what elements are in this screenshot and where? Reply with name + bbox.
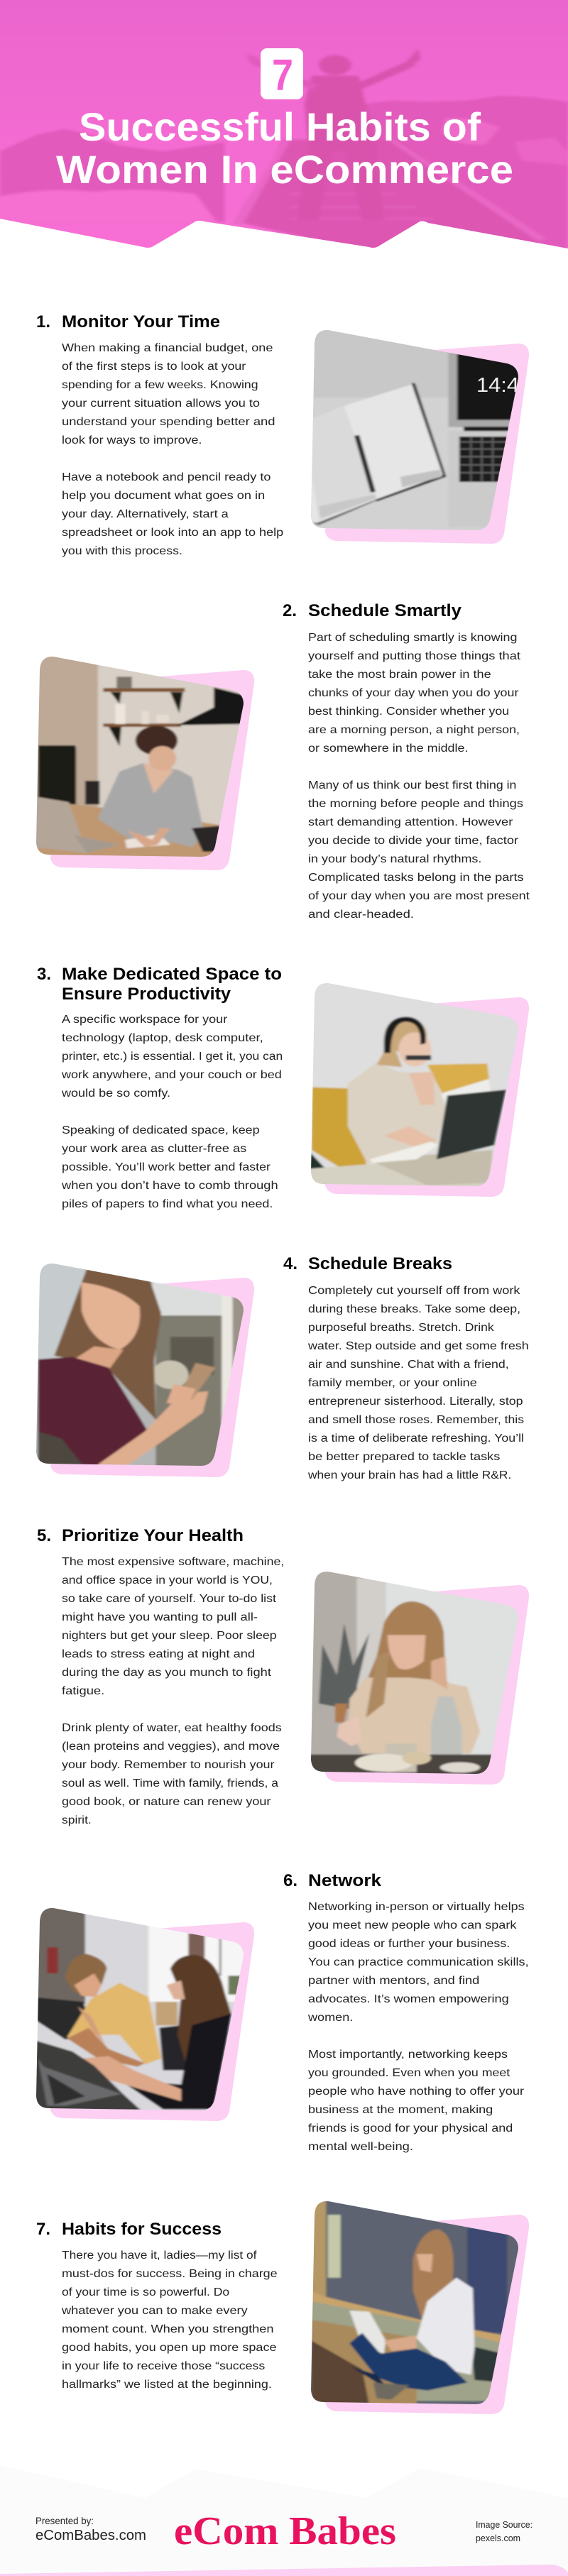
body text: you with this process. [62, 545, 182, 557]
presented by credit [36, 2515, 146, 2543]
body text: (lean proteins and veggies), and move [62, 1741, 280, 1753]
image source credit: Image Source: [476, 2519, 532, 2530]
body text: best thinking. Consider whether you [308, 706, 509, 718]
body text: Most importantly, networking keeps [308, 2049, 508, 2061]
body text: is a time of deliberate refreshing. You’ll [308, 1432, 524, 1445]
body text: The most expensive software, machine, [62, 1556, 284, 1568]
body text: you meet new people who can spark [308, 1919, 518, 1931]
logo: eCom Babes [174, 2509, 396, 2553]
body text: Complicated tasks belong in the parts [308, 872, 524, 884]
body text: A specific workspace for your [62, 1014, 228, 1026]
body text: in your body’s natural rhythms. [308, 853, 481, 865]
body text: might have you wanting to pull all- [62, 1611, 258, 1623]
body text: piles of papers to find what you need. [62, 1198, 273, 1210]
body text: people who have nothing to offer your [308, 2086, 525, 2098]
body text: of your day when you are most present [308, 890, 530, 902]
photo: woman looking at phone [33, 1261, 254, 1477]
body text: nighters but get your sleep. Poor sleep [62, 1630, 277, 1642]
body text: good habits, you open up more space [62, 2342, 277, 2354]
body text: family member, or your online [308, 1377, 477, 1389]
body text: whatever you can to make every [61, 2305, 248, 2317]
heading: 7. [36, 2220, 50, 2239]
section 6: network [33, 1871, 529, 2153]
heading: Schedule Breaks [308, 1254, 452, 1273]
footer faint background shape [0, 2465, 568, 2576]
body text: so take care of yourself. Your to-do list [62, 1593, 277, 1605]
body text: and clear-headed. [308, 909, 414, 921]
heading: 3. [37, 965, 51, 984]
body text: Completely cut yourself off from work [308, 1285, 521, 1297]
body text: take the most brain power in the [308, 669, 491, 681]
section 7: habits for success [36, 2196, 529, 2414]
body text: fatigue. [62, 1685, 104, 1697]
section 4: schedule breaks [33, 1254, 529, 1481]
body text: when you don’t have to comb through [61, 1180, 278, 1192]
body text: You can practice communication skills, [308, 1956, 529, 1968]
body text: technology (laptop, desk computer, [62, 1032, 263, 1044]
body text: the morning before people and things [308, 798, 523, 810]
photo: woman eating a meal [305, 1569, 529, 1785]
image source credit [476, 2519, 532, 2543]
body text: Part of scheduling smartly is knowing [308, 632, 517, 644]
body text: good book, or nature can renew your [62, 1796, 271, 1808]
body text: your body. Remember to nourish your [62, 1759, 275, 1771]
photo: woman with laptop on bench [305, 2196, 529, 2414]
body text: you grounded. Even when you meet [308, 2067, 510, 2079]
body text [307, 1901, 529, 2153]
body text: during these breaks. Take some deep, [308, 1303, 520, 1315]
body text: start demanding attention. However [308, 816, 513, 828]
body text [307, 1285, 529, 1481]
body text: and smell those roses. Remember, this [308, 1414, 524, 1426]
image source credit: pexels.com [476, 2533, 520, 2543]
body text: be better prepared to tackle tasks [308, 1451, 500, 1463]
photo: woman writing in kitchen [33, 653, 254, 870]
body text: must-dos for success. Being in charge [62, 2268, 278, 2280]
body text [62, 1556, 284, 1826]
heading: Schedule Smartly [308, 601, 462, 620]
heading: Ensure Productivity [62, 985, 231, 1004]
heading: Network [308, 1871, 382, 1890]
body text: women. [307, 2012, 353, 2024]
body text: and office space in your world is YOU, [62, 1574, 273, 1586]
body text: Speaking of dedicated space, keep [62, 1124, 260, 1136]
presented by credit: Presented by: [36, 2515, 94, 2526]
footer [0, 2465, 568, 2576]
body text: partner with mentors, and find [308, 1975, 479, 1987]
body text [61, 1014, 283, 1210]
body text: friends is good for your physical and [308, 2122, 513, 2134]
body text: Networking in-person or virtually helps [308, 1901, 525, 1913]
heading: Habits for Success [62, 2220, 222, 2239]
body text: during the day as you munch to fight [62, 1667, 272, 1679]
body text: or somewhere in the middle. [308, 742, 469, 755]
section 1: monitor your time [36, 312, 529, 557]
body text: business at the moment, making [308, 2104, 493, 2116]
body text: of your time is so powerful. Do [62, 2286, 229, 2298]
body text [308, 632, 530, 921]
body text: chunks of your day when you do your [308, 687, 519, 699]
body text: spirit. [62, 1814, 92, 1826]
photo: notebook and laptop [305, 327, 529, 544]
number badge [261, 48, 303, 100]
heading: 5. [37, 1526, 51, 1545]
body text: you decide to divide your time, factor [308, 835, 519, 847]
section 2: schedule smartly [33, 601, 530, 921]
body text: possible. You’ll work better and faster [62, 1161, 271, 1173]
body text: when your brain has had a little R&R. [307, 1469, 511, 1481]
body text: help you document what goes on in [62, 490, 265, 502]
body text: would be so comfy. [61, 1087, 170, 1100]
body text: moment count. When you strengthen [62, 2323, 274, 2335]
body text: purposeful breaths. Stretch. Drink [308, 1322, 495, 1334]
body text [61, 2249, 278, 2391]
body text: look for ways to improve. [62, 434, 202, 446]
title: Successful Habits of [79, 104, 481, 149]
body text: work anywhere, and your couch or bed [61, 1069, 282, 1081]
heading: 4. [283, 1254, 297, 1273]
body text [62, 342, 283, 557]
body text: printer, etc.) is essential. I get it, you can [62, 1051, 283, 1063]
body text: mental well-being. [308, 2141, 413, 2153]
number badge: 7 [272, 51, 293, 100]
body text: spreadsheet or look into an app to help [62, 527, 283, 539]
body text: When making a financial budget, one [62, 342, 273, 354]
heading: 2. [283, 601, 297, 620]
body text: yourself and putting those things that [308, 650, 521, 662]
heading [37, 965, 282, 1004]
body text: Have a notebook and pencil ready to [62, 471, 271, 483]
body text: your current situation allows you to [62, 398, 260, 410]
body text: There you have it, ladies—my list of [62, 2249, 257, 2262]
body text: entrepreneur sisterhood. Literally, stop [308, 1396, 523, 1408]
heading: Monitor Your Time [62, 312, 220, 331]
section 5: prioritize your health [37, 1526, 529, 1826]
presented by credit: eComBabes.com [36, 2528, 146, 2543]
heading: 6. [283, 1871, 297, 1890]
laptop clock text: 14:4 [476, 374, 519, 397]
body text: air and sunshine. Chat with a friend, [308, 1359, 509, 1371]
body text: understand your spending better and [62, 416, 275, 428]
body text: leads to stress eating at night and [62, 1648, 255, 1660]
title [56, 104, 513, 192]
heading: Make Dedicated Space to [62, 965, 282, 984]
photo: woman with headphones on sofa [305, 980, 529, 1197]
heading: Prioritize Your Health [62, 1526, 244, 1545]
heading [283, 1871, 382, 1890]
body text: in your life to receive those “success [62, 2360, 265, 2372]
body text: spending for a few weeks. Knowing [62, 379, 258, 391]
hero background photo: woman on bridge [0, 0, 568, 251]
hero banner [0, 0, 568, 251]
section 3: make dedicated space [37, 965, 529, 1210]
body text: your work area as clutter-free as [62, 1143, 246, 1155]
body text: good ideas or further your business. [308, 1938, 510, 1950]
body text: of the first steps is to look at your [62, 361, 246, 373]
body text: are a morning person, a night person, [308, 724, 520, 736]
body text: water. Step outside and get some fresh [307, 1340, 529, 1352]
body text: your day. Alternatively, start a [62, 508, 229, 520]
photo: two women at a laptop [33, 1904, 254, 2121]
bottom pink strip [0, 2565, 568, 2576]
body text: hallmarks” we listed at the beginning. [62, 2379, 272, 2391]
body text: Many of us think our best first thing in [308, 779, 516, 791]
heading: 1. [36, 312, 50, 331]
body text: soul as well. Time with family, friends, a [62, 1777, 278, 1790]
body text: Drink plenty of water, eat healthy foods [62, 1722, 282, 1734]
body text: advocates. It’s women empowering [308, 1993, 509, 2005]
title: Women In eCommerce [56, 147, 513, 192]
